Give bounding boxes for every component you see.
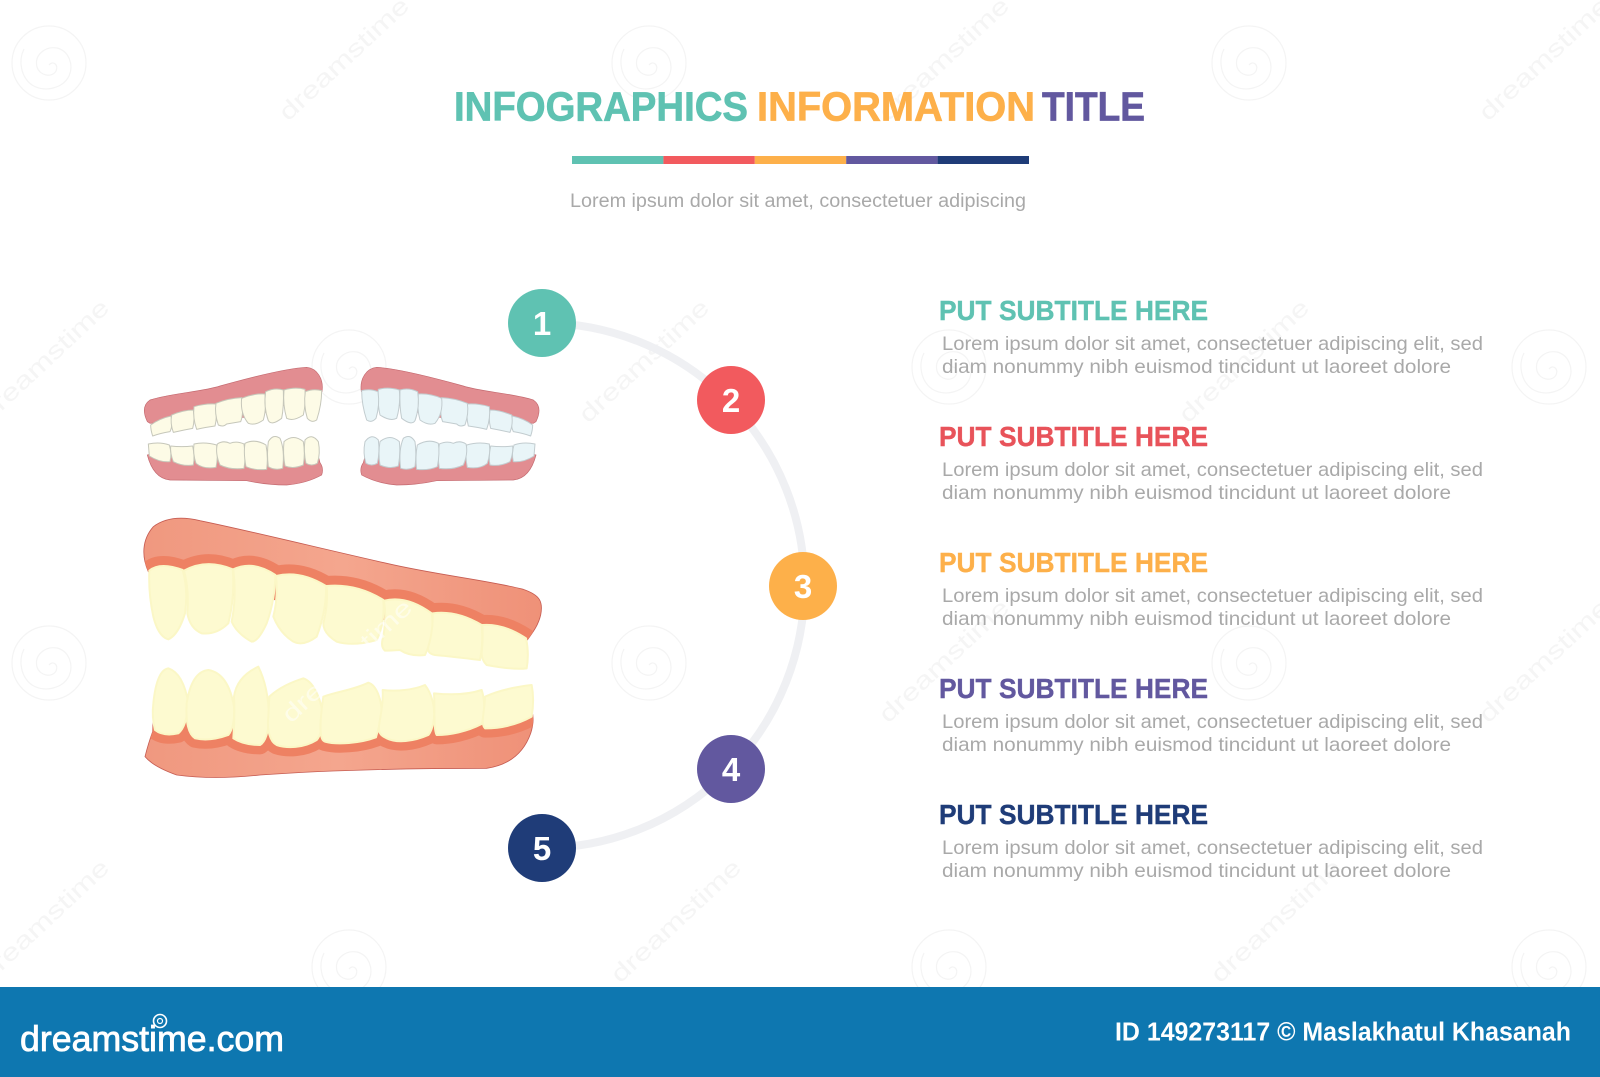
text: dreamstime	[574, 294, 715, 428]
text block 1: Lorem ipsum dolor sit amet, consectetuer adipiscing elit, sed	[942, 333, 1483, 355]
text block 3: diam nonummy nibh euismod tincidunt ut laoreet dolore	[942, 608, 1451, 630]
step 1 marker: 1	[533, 305, 551, 342]
footer credit: ID 149273117 © Maslakhatul Khasanah	[1115, 1018, 1571, 1046]
text block 5: Lorem ipsum dolor sit amet, consectetuer adipiscing elit, sed	[942, 837, 1483, 859]
text block 4: diam nonummy nibh euismod tincidunt ut laoreet dolore	[942, 734, 1451, 756]
footer bar	[0, 987, 1600, 1077]
title divider	[572, 156, 1029, 164]
title: INFORMATION	[757, 84, 1035, 130]
text block 2: Lorem ipsum dolor sit amet, consectetuer adipiscing elit, sed	[942, 459, 1483, 481]
text block 1	[939, 295, 1483, 378]
step 4 marker: 4	[722, 751, 741, 788]
step 1 marker	[508, 289, 576, 357]
text block 3: Lorem ipsum dolor sit amet, consectetuer adipiscing elit, sed	[942, 585, 1483, 607]
text block 1: PUT SUBTITLE HERE	[939, 295, 1208, 326]
text: dreamstime	[1474, 0, 1600, 126]
step 2 marker	[697, 366, 765, 434]
text: dreamstime	[1474, 594, 1600, 728]
text: dreamstime	[606, 854, 747, 988]
text block 3	[939, 547, 1483, 630]
small teeth illustration: right side	[361, 367, 539, 485]
step 3 marker: 3	[794, 568, 812, 605]
text block 5: diam nonummy nibh euismod tincidunt ut laoreet dolore	[942, 860, 1451, 882]
footer logo: dreamstime.com	[20, 1018, 284, 1059]
small teeth illustration: left side	[144, 367, 323, 485]
text: dreamstime	[1206, 854, 1347, 988]
title: INFOGRAPHICS	[454, 84, 748, 130]
text: dreamstime	[274, 0, 415, 126]
text block 5	[939, 799, 1483, 882]
timeline arc	[542, 323, 804, 848]
step 2 marker: 2	[722, 382, 740, 419]
text block 2: diam nonummy nibh euismod tincidunt ut laoreet dolore	[942, 482, 1451, 504]
text block 2	[939, 421, 1483, 504]
text: dreamstime	[874, 594, 1015, 728]
step 3 marker	[769, 552, 837, 620]
title	[454, 84, 1145, 130]
large teeth illustration	[144, 518, 541, 777]
text block 3: PUT SUBTITLE HERE	[939, 547, 1208, 578]
text: dreamstime	[874, 0, 1015, 126]
text block 2: PUT SUBTITLE HERE	[939, 421, 1208, 452]
title description: Lorem ipsum dolor sit amet, consectetuer adipiscing	[570, 191, 1026, 212]
title: TITLE	[1042, 84, 1145, 130]
text block 5: PUT SUBTITLE HERE	[939, 799, 1208, 830]
text block 4: PUT SUBTITLE HERE	[939, 673, 1208, 704]
text block 4	[939, 673, 1483, 756]
text: dreamstime	[277, 594, 418, 728]
step 5 marker	[508, 814, 576, 882]
text: dreamstime	[1174, 294, 1315, 428]
text block 1: diam nonummy nibh euismod tincidunt ut laoreet dolore	[942, 356, 1451, 378]
text block 4: Lorem ipsum dolor sit amet, consectetuer adipiscing elit, sed	[942, 711, 1483, 733]
step 4 marker	[697, 735, 765, 803]
step 5 marker: 5	[533, 830, 551, 867]
